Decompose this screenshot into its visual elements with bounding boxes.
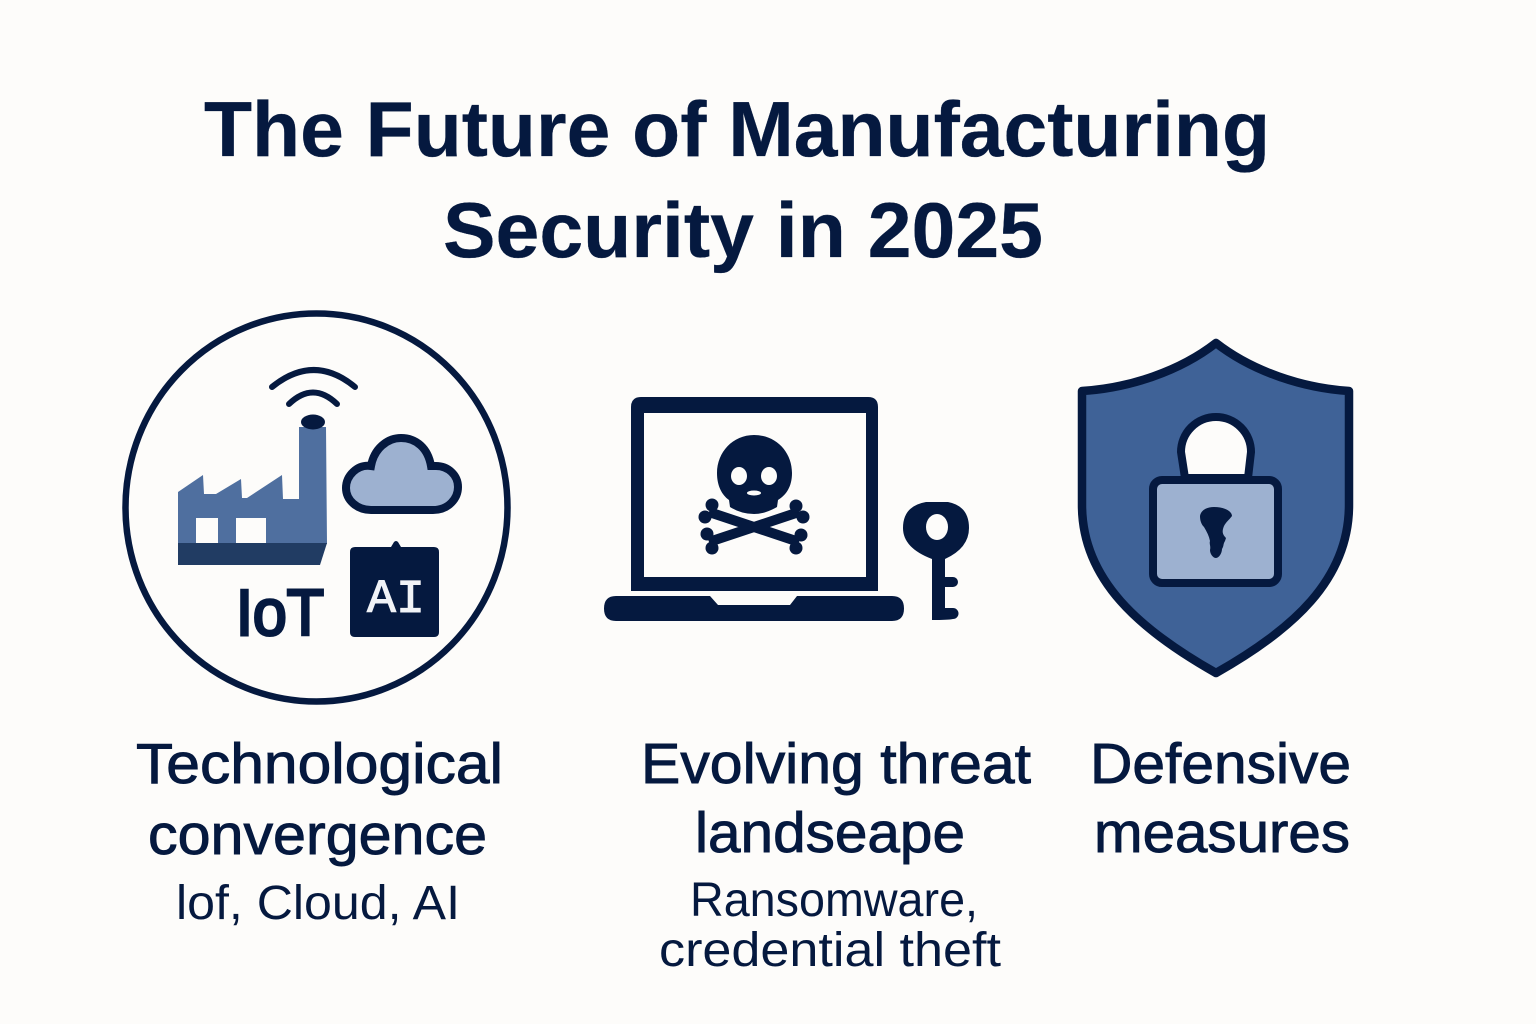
icon: skull and crossbones: [698, 435, 810, 554]
shield: [1082, 343, 1349, 673]
title: The Future of Manufacturing: [204, 85, 1270, 173]
icon: AI chip: [350, 541, 439, 637]
title: [204, 85, 1270, 274]
text block: evolving threat landscape: [641, 732, 1031, 977]
title: Security in 2025: [443, 186, 1043, 274]
padlock body: [1153, 480, 1278, 583]
text block: evolving threat landscape: landseape: [695, 801, 965, 865]
icon: wifi signal: [272, 370, 355, 404]
text block: technological convergence: lof, Cloud, AI: [176, 877, 460, 930]
text block: technological convergence: Technological: [136, 732, 503, 796]
padlock keyhole: [1200, 507, 1232, 558]
text block: defensive measures: Defensive: [1090, 732, 1351, 796]
text block: evolving threat landscape: Ransomware,: [690, 874, 978, 927]
text block: defensive measures: [1090, 732, 1351, 865]
padlock shackle: [1181, 417, 1251, 478]
icon: laptop with skull and key: [604, 397, 969, 621]
text block: evolving threat landscape: Evolving threat: [641, 732, 1031, 796]
icon: AI chip: AI: [367, 574, 425, 627]
icon label: IoT: IoT: [236, 576, 324, 649]
text block: technological convergence: [136, 732, 503, 930]
text block: technological convergence: convergence: [148, 803, 487, 867]
text block: defensive measures: measures: [1094, 801, 1350, 865]
text block: evolving threat landscape: credential theft: [659, 924, 1001, 977]
icon: factory: [178, 414, 327, 565]
icon: laptop: [604, 397, 904, 621]
icon: cloud: [346, 438, 458, 510]
icon: technological convergence: [126, 314, 508, 702]
icon: shield with padlock: [1082, 343, 1349, 673]
icon: key: [903, 502, 969, 620]
